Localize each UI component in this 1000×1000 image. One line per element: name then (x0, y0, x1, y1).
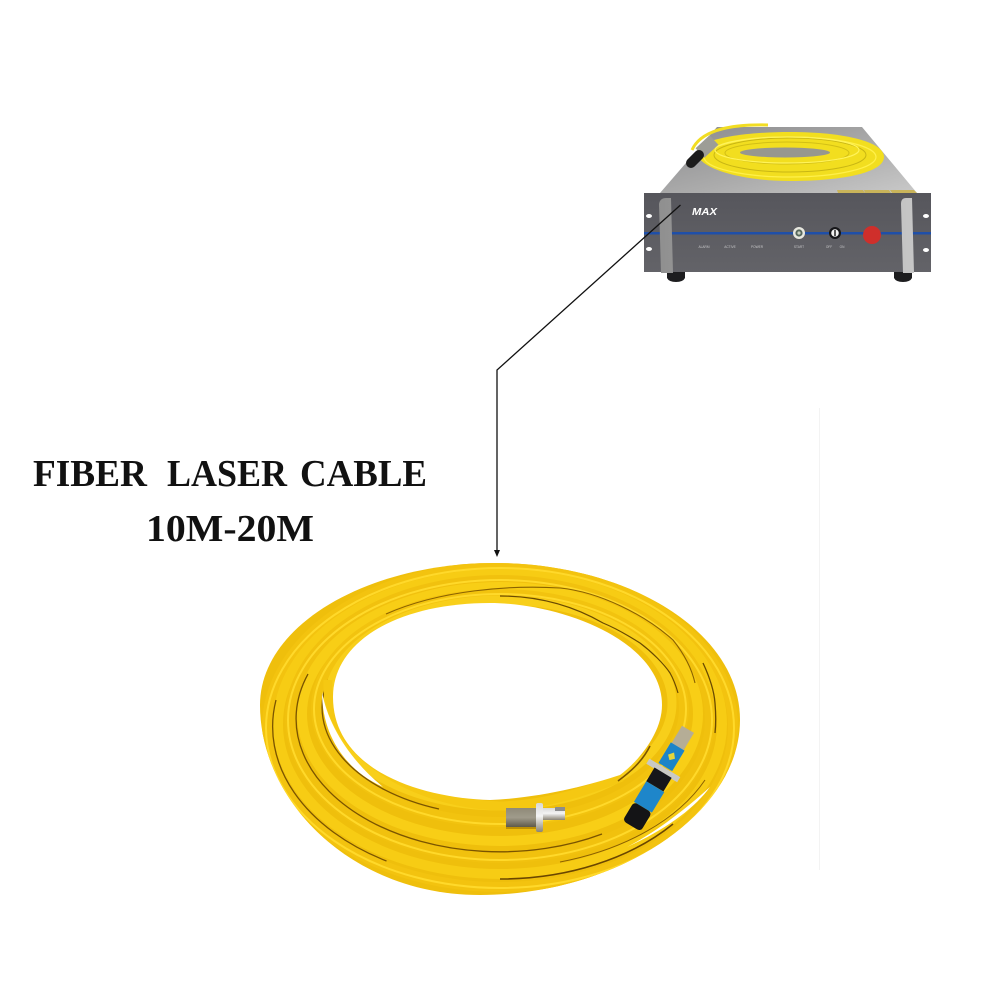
indicator labels: OFF (826, 245, 832, 249)
indicator labels: ON (840, 245, 845, 249)
indicator labels: ACTIVE (724, 245, 736, 249)
emergency stop button (863, 226, 881, 244)
machine top cover (660, 127, 917, 193)
yellow vents (837, 190, 917, 193)
dark strand gaps (273, 587, 716, 879)
fiber connector: silver end (506, 803, 565, 832)
cable name: FIBER (33, 453, 148, 495)
cable name: CABLE (300, 453, 427, 495)
yellow fiber cable coil (260, 563, 740, 895)
start button (793, 227, 805, 239)
fiber connector: QBH head (615, 720, 703, 835)
inner thin cable (328, 680, 622, 806)
rack mounting holes (646, 214, 929, 252)
feet (667, 272, 912, 282)
cable length: 10M-20M (146, 508, 314, 550)
title (33, 453, 427, 550)
machine cable connector (691, 140, 714, 163)
logo: MAX (692, 206, 718, 218)
cable strands (267, 567, 733, 887)
white gaps between loops (322, 692, 383, 787)
coil centre opening (333, 603, 662, 800)
inner cable end shadow (618, 746, 650, 781)
laser machine (644, 125, 931, 282)
handles (659, 198, 914, 273)
blue stripe (644, 232, 931, 234)
connector line with arrow (494, 205, 680, 557)
key switch (829, 227, 841, 239)
cable name (33, 453, 427, 495)
cable name: LASER (167, 453, 288, 495)
coil body (260, 563, 740, 895)
machine fiber coil (692, 125, 884, 181)
strand highlights (266, 568, 734, 888)
indicator labels: START (794, 245, 804, 249)
indicator labels: POWER (751, 245, 764, 249)
front panel (644, 193, 931, 272)
indicator labels: ALARM (699, 245, 710, 249)
indicator labels (699, 245, 845, 249)
